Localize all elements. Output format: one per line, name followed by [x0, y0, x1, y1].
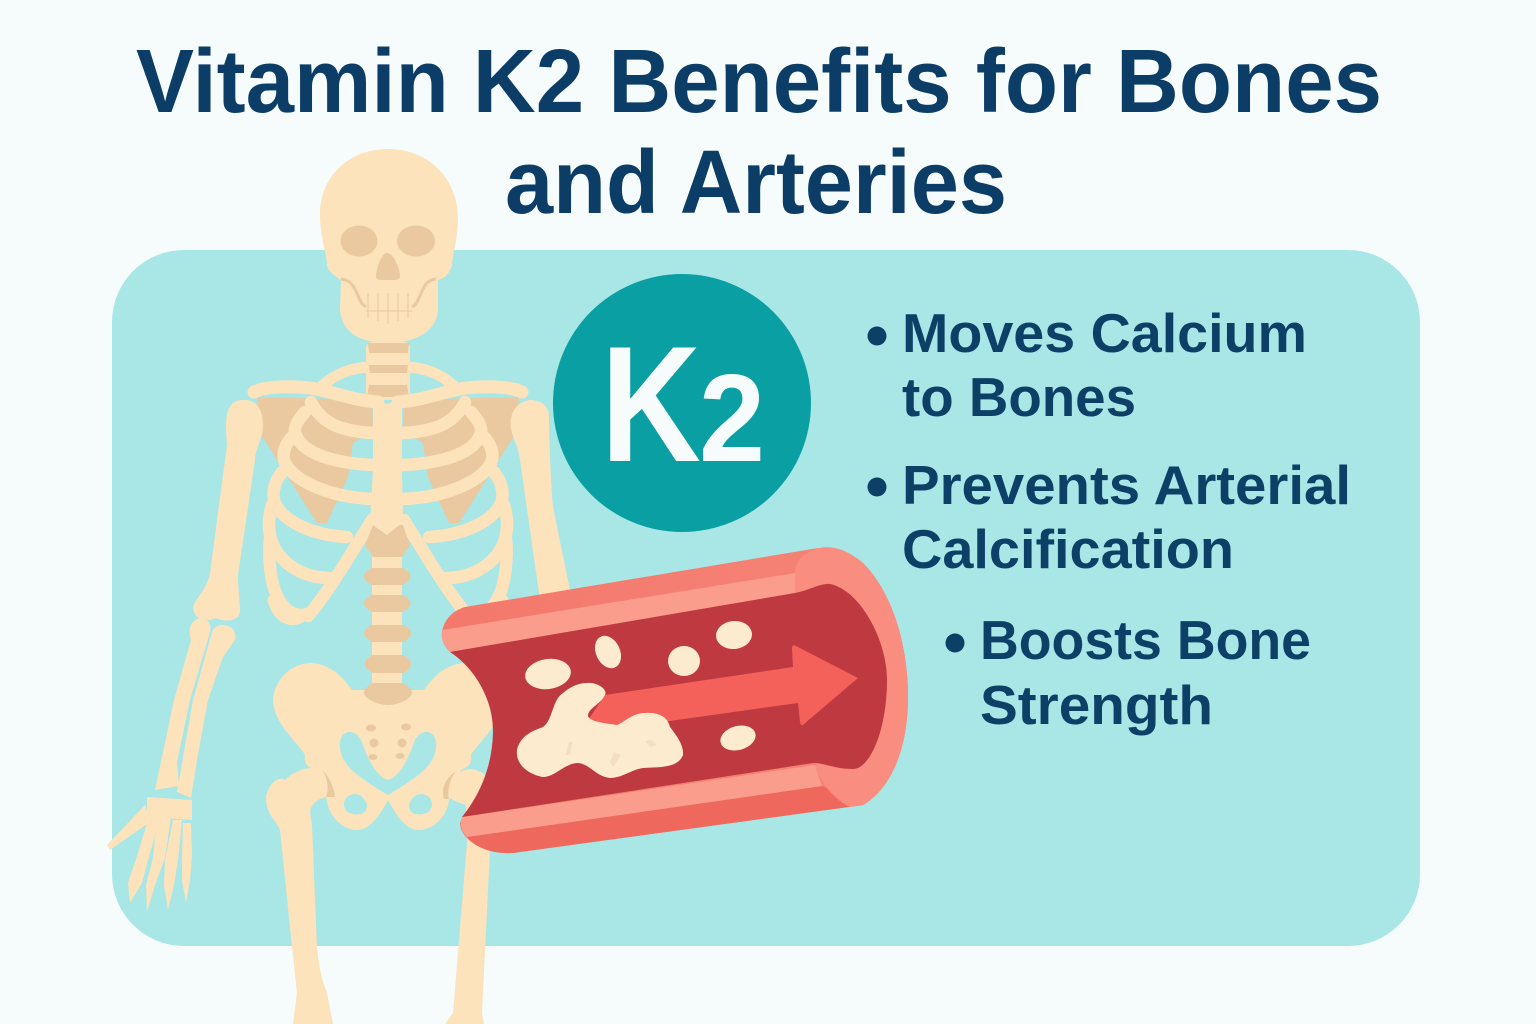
- K2 badge: K: [601, 312, 701, 496]
- artery lumen: [450, 584, 887, 817]
- panel: teal background: [112, 250, 1420, 946]
- scapula and lung shading: [257, 397, 519, 523]
- right rib cage: [401, 402, 507, 621]
- right femur: [443, 769, 495, 1024]
- sternum: [370, 399, 403, 535]
- nose: [376, 253, 400, 280]
- upper clavicle arcs: [322, 367, 454, 386]
- K2 badge: 2: [699, 350, 765, 488]
- jaw and teeth: [341, 279, 436, 324]
- bullet: prevents calcification: Calcification: [902, 518, 1234, 580]
- calcium plaque: [517, 683, 683, 778]
- pelvis: [273, 663, 503, 830]
- bullet: prevents calcification: [868, 454, 1351, 580]
- title: Vitamin K2 Benefits for Bones: [136, 32, 1382, 132]
- bullet: prevents calcification: Prevents Arterial: [902, 454, 1351, 516]
- left arm: [107, 400, 263, 912]
- left rib cage: [269, 402, 375, 621]
- bullet: moves calcium: to Bones: [902, 366, 1136, 428]
- skeleton illustration: [107, 149, 572, 1024]
- artery open end rim: [795, 547, 908, 807]
- right upper arm: [511, 400, 572, 600]
- bullet: moves calcium: [868, 302, 1307, 428]
- bullet: moves calcium: Moves Calcium: [902, 302, 1307, 364]
- bullet: boosts bone strength: Boosts Bone: [980, 609, 1311, 671]
- artery outer wall: [442, 548, 908, 853]
- sacrum cap: [364, 683, 412, 705]
- blood flow arrow: [588, 645, 858, 728]
- artery lower wall: [467, 786, 863, 853]
- K2 badge: [553, 274, 811, 532]
- hand: [107, 797, 192, 912]
- skull: [320, 149, 458, 343]
- calcium particles: [523, 619, 758, 754]
- spine: [364, 342, 411, 695]
- benefit list: [868, 302, 1351, 736]
- artery light band top: [442, 573, 795, 652]
- clavicles: [254, 387, 522, 402]
- sacral foramina: [366, 724, 411, 760]
- title: and Arteries: [505, 133, 1007, 233]
- artery illustration: [442, 547, 908, 853]
- artery light band bottom: [461, 765, 822, 837]
- eye sockets: [340, 226, 435, 256]
- bullet: boosts bone strength: Strength: [980, 674, 1213, 736]
- title: [136, 32, 1382, 233]
- bullet: boosts bone strength: [946, 609, 1311, 736]
- left femur: [266, 768, 335, 1024]
